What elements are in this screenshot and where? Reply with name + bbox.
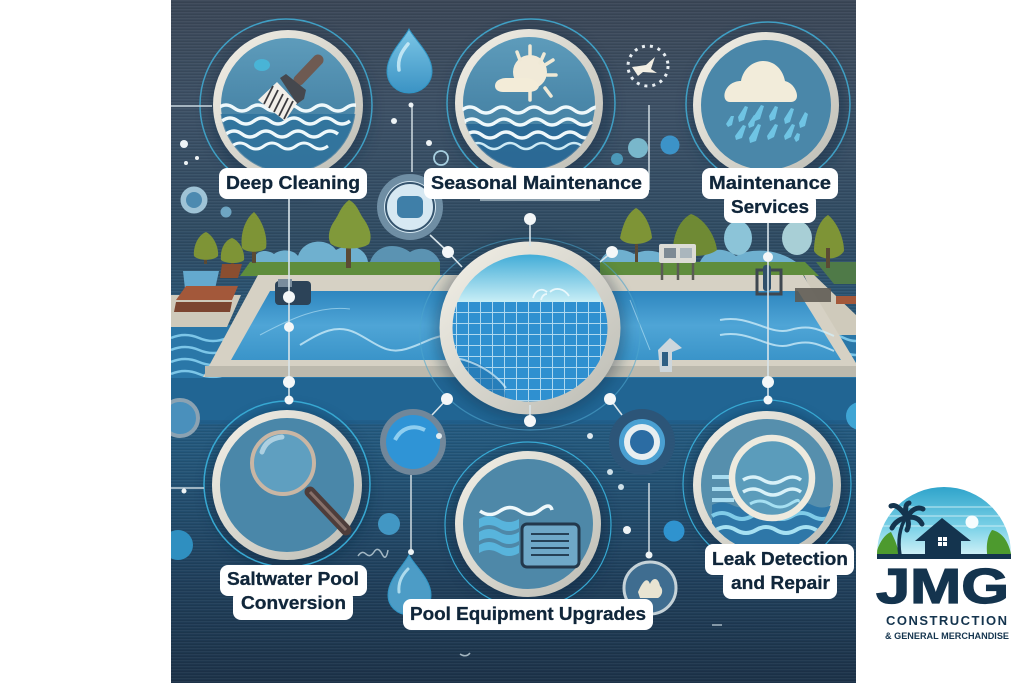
label: Leak Detection and Repair: Leak Detection <box>712 548 848 569</box>
label: Saltwater Pool Conversion: Conversion <box>241 592 346 613</box>
central pool detail ring <box>420 238 640 430</box>
label: Saltwater Pool Conversion <box>220 565 367 620</box>
icon: rain cloud <box>724 61 808 143</box>
lower water surface band <box>171 325 868 424</box>
label: Seasonal Maintenance: Seasonal Maintenance <box>431 172 642 193</box>
label: Leak Detection and Repair <box>705 544 854 599</box>
label: Deep Cleaning: Deep Cleaning <box>226 172 360 193</box>
icon: water drop bottom <box>388 555 431 615</box>
service circle: saltwater pool conversion <box>204 401 370 570</box>
pool deck and water <box>171 275 856 377</box>
trees <box>194 200 844 268</box>
label: Maintenance Services: Maintenance <box>709 172 831 193</box>
service circle: pool equipment upgrades <box>445 442 611 608</box>
label: Saltwater Pool Conversion: Saltwater Pool <box>227 568 359 589</box>
label: Deep Cleaning <box>219 168 367 199</box>
page background panel <box>162 0 874 683</box>
logo: JMG Construction <box>875 487 1012 642</box>
label: Seasonal Maintenance <box>424 168 649 199</box>
label: Leak Detection and Repair: and Repair <box>731 572 830 593</box>
service circle: deep cleaning <box>199 18 373 168</box>
round blue trees <box>724 221 812 255</box>
service circle: seasonal maintenance <box>446 18 616 168</box>
service circle: maintenance services <box>685 21 851 168</box>
wave lines <box>220 103 356 168</box>
label: Pool Equipment Upgrades <box>403 599 653 630</box>
small decorative dots and bubbles <box>162 102 874 656</box>
label: Pool Equipment Upgrades: Pool Equipment Upgrades <box>410 603 646 624</box>
badge: blue orb <box>380 409 446 475</box>
logo subtitle line 2: & GENERAL MERCHANDISE <box>885 631 1009 642</box>
machine at right of pool <box>757 265 856 304</box>
wave lines <box>462 105 596 168</box>
icon: sun and cloud <box>495 46 556 100</box>
badge: ring orb <box>609 409 675 475</box>
logo subtitle line 1: CONSTRUCTION <box>886 613 1007 628</box>
icon: waves and control panel <box>479 506 579 567</box>
icon: water drop top <box>387 29 432 93</box>
wave lines <box>711 475 831 544</box>
landscape background with clouds and grass <box>240 242 856 284</box>
logo palm tree <box>891 503 923 555</box>
equipment box <box>659 244 696 280</box>
badge: small flower <box>624 562 676 614</box>
badge: small target at left <box>180 186 208 214</box>
label: Maintenance Services: Services <box>731 196 809 217</box>
label: Maintenance Services <box>702 168 838 223</box>
icon: sparkle compass <box>628 46 668 86</box>
logo house <box>915 518 971 555</box>
sun lounger <box>174 264 242 312</box>
pool pump left <box>275 279 311 305</box>
icon: brush <box>258 60 318 121</box>
logo dome scene <box>875 487 1012 560</box>
thin link lines into circles <box>171 106 212 494</box>
connector lines and nodes <box>283 199 774 427</box>
badge: top centre-left <box>377 174 443 240</box>
icon: leak magnifier <box>732 438 812 518</box>
pool ladder <box>658 338 682 372</box>
service circle: leak detection and repair <box>682 400 852 546</box>
icon: magnifying glass <box>252 432 346 530</box>
logo wordmark: JMG <box>876 560 1009 614</box>
logo base bar <box>877 554 1011 559</box>
